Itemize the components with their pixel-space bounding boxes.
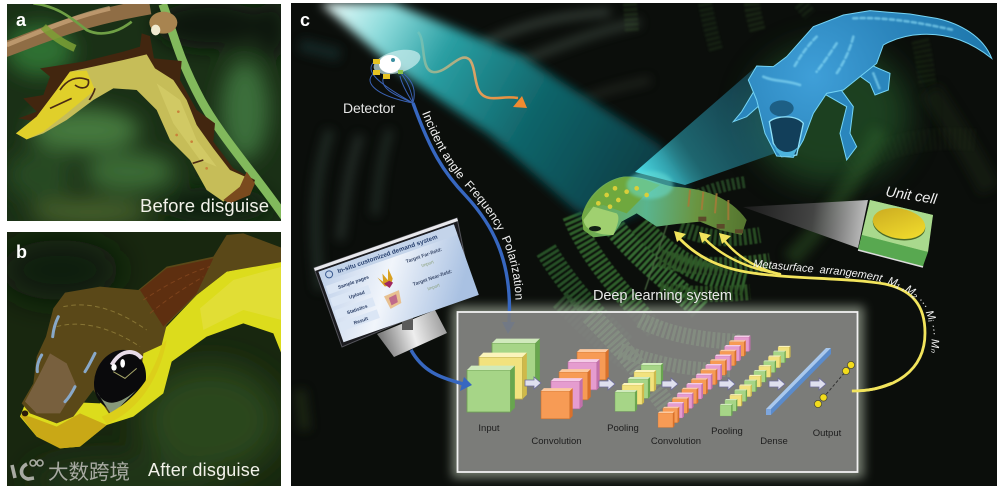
layer arrows — [525, 377, 826, 390]
label b: b — [16, 242, 27, 262]
layer labels: Input — [478, 423, 500, 434]
thin tendril — [33, 3, 132, 33]
ferns under caterpillar — [536, 176, 772, 312]
first pooling blocks — [615, 363, 663, 411]
yellow caterpillar body — [16, 54, 245, 202]
layer labels: Output — [813, 428, 842, 439]
green hologram glow — [750, 45, 910, 185]
layer labels: Pooling — [711, 426, 743, 437]
fake snake eye — [94, 350, 146, 408]
panel c: metasurface deep learning schematic — [291, 3, 997, 486]
unit cell label: Unit cell — [884, 184, 939, 208]
deep learning network box — [458, 312, 858, 472]
monitor — [314, 218, 479, 357]
head markings — [50, 78, 203, 163]
dense layer bar — [766, 348, 831, 415]
first convolution blocks — [541, 349, 609, 419]
panel a: before disguise photo — [3, 0, 288, 226]
blue arrow from monitor into input — [411, 350, 472, 391]
crocodile projection cone — [635, 65, 775, 185]
crocodile open mouth — [770, 100, 794, 116]
monitor frame — [314, 218, 472, 347]
monitor screen: Result — [353, 316, 369, 327]
dark caterpillar back — [18, 33, 255, 200]
yellow snake body — [20, 260, 283, 448]
network box glow — [452, 306, 864, 478]
monitor screen: In-situ customized demand system — [337, 234, 439, 275]
panel b: after disguise photo — [0, 232, 283, 489]
head scale texture — [57, 267, 210, 347]
monitor screen — [319, 224, 479, 342]
orange incident wave arrow — [418, 32, 527, 108]
monitor screen: Upload — [348, 290, 366, 301]
output nodes — [814, 361, 855, 408]
yellow output line over box edge — [852, 383, 892, 391]
caption: after disguise: After disguise — [148, 460, 260, 480]
panel label c: c — [300, 10, 310, 30]
blue signal line from detector into network — [413, 103, 515, 334]
tail dark patch — [223, 172, 255, 203]
blurred jungle background — [300, 3, 990, 430]
monitor screen: Target Far-field: — [405, 247, 443, 265]
yellow metasurface arrows — [674, 231, 925, 391]
caption: before disguise: Before disguise — [140, 195, 269, 216]
label a: a — [16, 10, 27, 30]
hologram crocodile — [733, 11, 992, 160]
layer labels — [478, 423, 842, 447]
monitor screen: Import — [421, 259, 435, 268]
deep learning system heading: Deep learning system — [593, 288, 732, 304]
lower jaw yellow edge — [102, 340, 167, 424]
detector — [370, 50, 420, 104]
crocodile body — [748, 11, 992, 157]
layer labels: Dense — [760, 436, 788, 447]
watermark logo — [12, 460, 43, 479]
layer labels: Pooling — [607, 423, 639, 434]
branch — [3, 7, 150, 50]
second convolution blocks — [658, 336, 750, 428]
monitor screen: Sample pages — [337, 274, 370, 291]
layer labels: Convolution — [531, 436, 582, 447]
zoom-in wedge to unit cell — [743, 200, 868, 248]
light beam — [320, 3, 690, 225]
blue markings — [37, 317, 95, 402]
brown head and back — [22, 233, 283, 423]
green vine stem — [163, 4, 284, 217]
crocodile skin streaks — [763, 18, 953, 90]
monitor screen: Import — [427, 282, 441, 291]
monitor screen: Statistics — [346, 303, 369, 316]
metasurface arrangement text along curve: Metasurface arrangement M₁ ,M₂ ··· Mᵢ ··· Mₙ — [753, 260, 940, 353]
watermark text: 大数跨境 — [48, 461, 130, 484]
second pooling blocks — [720, 346, 791, 416]
bud — [149, 12, 177, 34]
faint ferns in box — [590, 315, 740, 410]
monitor stand — [377, 310, 447, 357]
hologram caterpillar — [582, 171, 747, 237]
crocodile limbs — [733, 60, 890, 160]
input layer blocks — [467, 339, 540, 412]
far-field icon — [376, 268, 395, 291]
monitor screen: Target Near-field: — [412, 269, 454, 288]
detector label: Detector — [343, 100, 395, 116]
text along blue line: Incident angle Frequency Polarization — [422, 110, 524, 300]
unit cell — [858, 200, 933, 267]
layer labels: Convolution — [651, 436, 701, 447]
near-field icon — [384, 290, 404, 310]
